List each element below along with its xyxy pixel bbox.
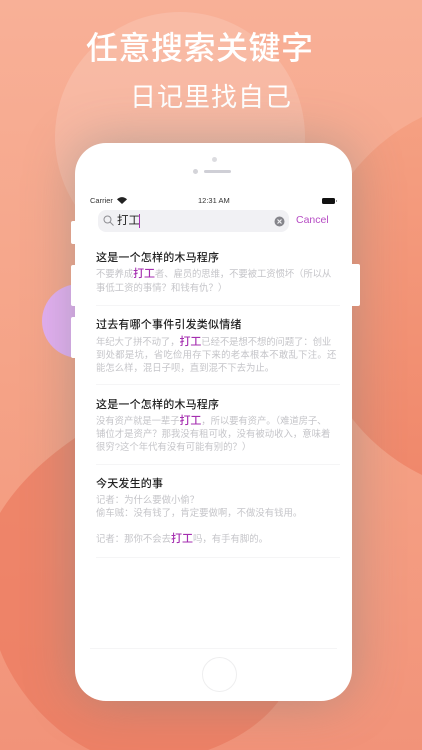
phone speaker and camera xyxy=(193,157,231,174)
result 2 xyxy=(96,318,340,385)
icon: clear xyxy=(274,216,284,226)
search text: 打工 xyxy=(117,215,140,227)
result 3: 没有资产就是一辈子打工，所以要有资产。（难道房子、 xyxy=(96,415,326,427)
icon: magnifier xyxy=(104,216,114,226)
result 1: 事低工资的事情？和钱有仇？） xyxy=(96,282,227,293)
result 1: 不要养成打工者、雇员的思维，不要被工资惯坏（所以从 xyxy=(96,268,331,280)
result 2: 过去有哪个事件引发类似情绪 xyxy=(96,319,242,331)
result 3: 铺位才是资产？那我没有租可收，没有被动收入，意味着 xyxy=(96,428,330,439)
result 3: 这是一个怎样的木马程序 xyxy=(96,399,219,411)
phone xyxy=(75,143,352,701)
result 2: 到处都是坑，省吃俭用存下来的老本根本不敢乱下注。还 xyxy=(96,349,337,360)
result 3 xyxy=(96,398,340,465)
result 4: 记者：那你不会去打工吗，有手有脚的。 xyxy=(96,533,268,545)
bottom divider xyxy=(90,648,337,649)
text cursor xyxy=(139,214,140,228)
search bar xyxy=(98,210,289,232)
result 2: 年纪大了拼不动了，打工已经不是想不想的问题了：创业 xyxy=(96,336,331,348)
result 3: 很穷?这个年代有没有可能有别的？） xyxy=(96,441,251,452)
status bar xyxy=(90,196,337,205)
status bar: Carrier xyxy=(90,196,113,205)
result 1: 这是一个怎样的木马程序 xyxy=(96,252,219,264)
result 1 xyxy=(96,252,340,306)
status bar: 12:31 AM xyxy=(198,196,230,205)
result 4: 偷车贼：没有钱了，肯定要做啊，不做没有钱用。 xyxy=(96,507,302,518)
phone side buttons xyxy=(71,221,360,358)
cancel button: Cancel xyxy=(296,214,329,226)
subtitle: 日记里找自己 xyxy=(130,82,292,112)
result 2: 能怎么样，混日子呗，直到混不下去为止。 xyxy=(96,362,274,373)
title: 任意搜索关键字 xyxy=(86,30,314,66)
result 4: 记者：为什么要做小偷？ xyxy=(96,494,199,505)
result 4 xyxy=(96,478,340,558)
home button xyxy=(202,657,237,692)
result 4: 今天发生的事 xyxy=(96,478,163,490)
